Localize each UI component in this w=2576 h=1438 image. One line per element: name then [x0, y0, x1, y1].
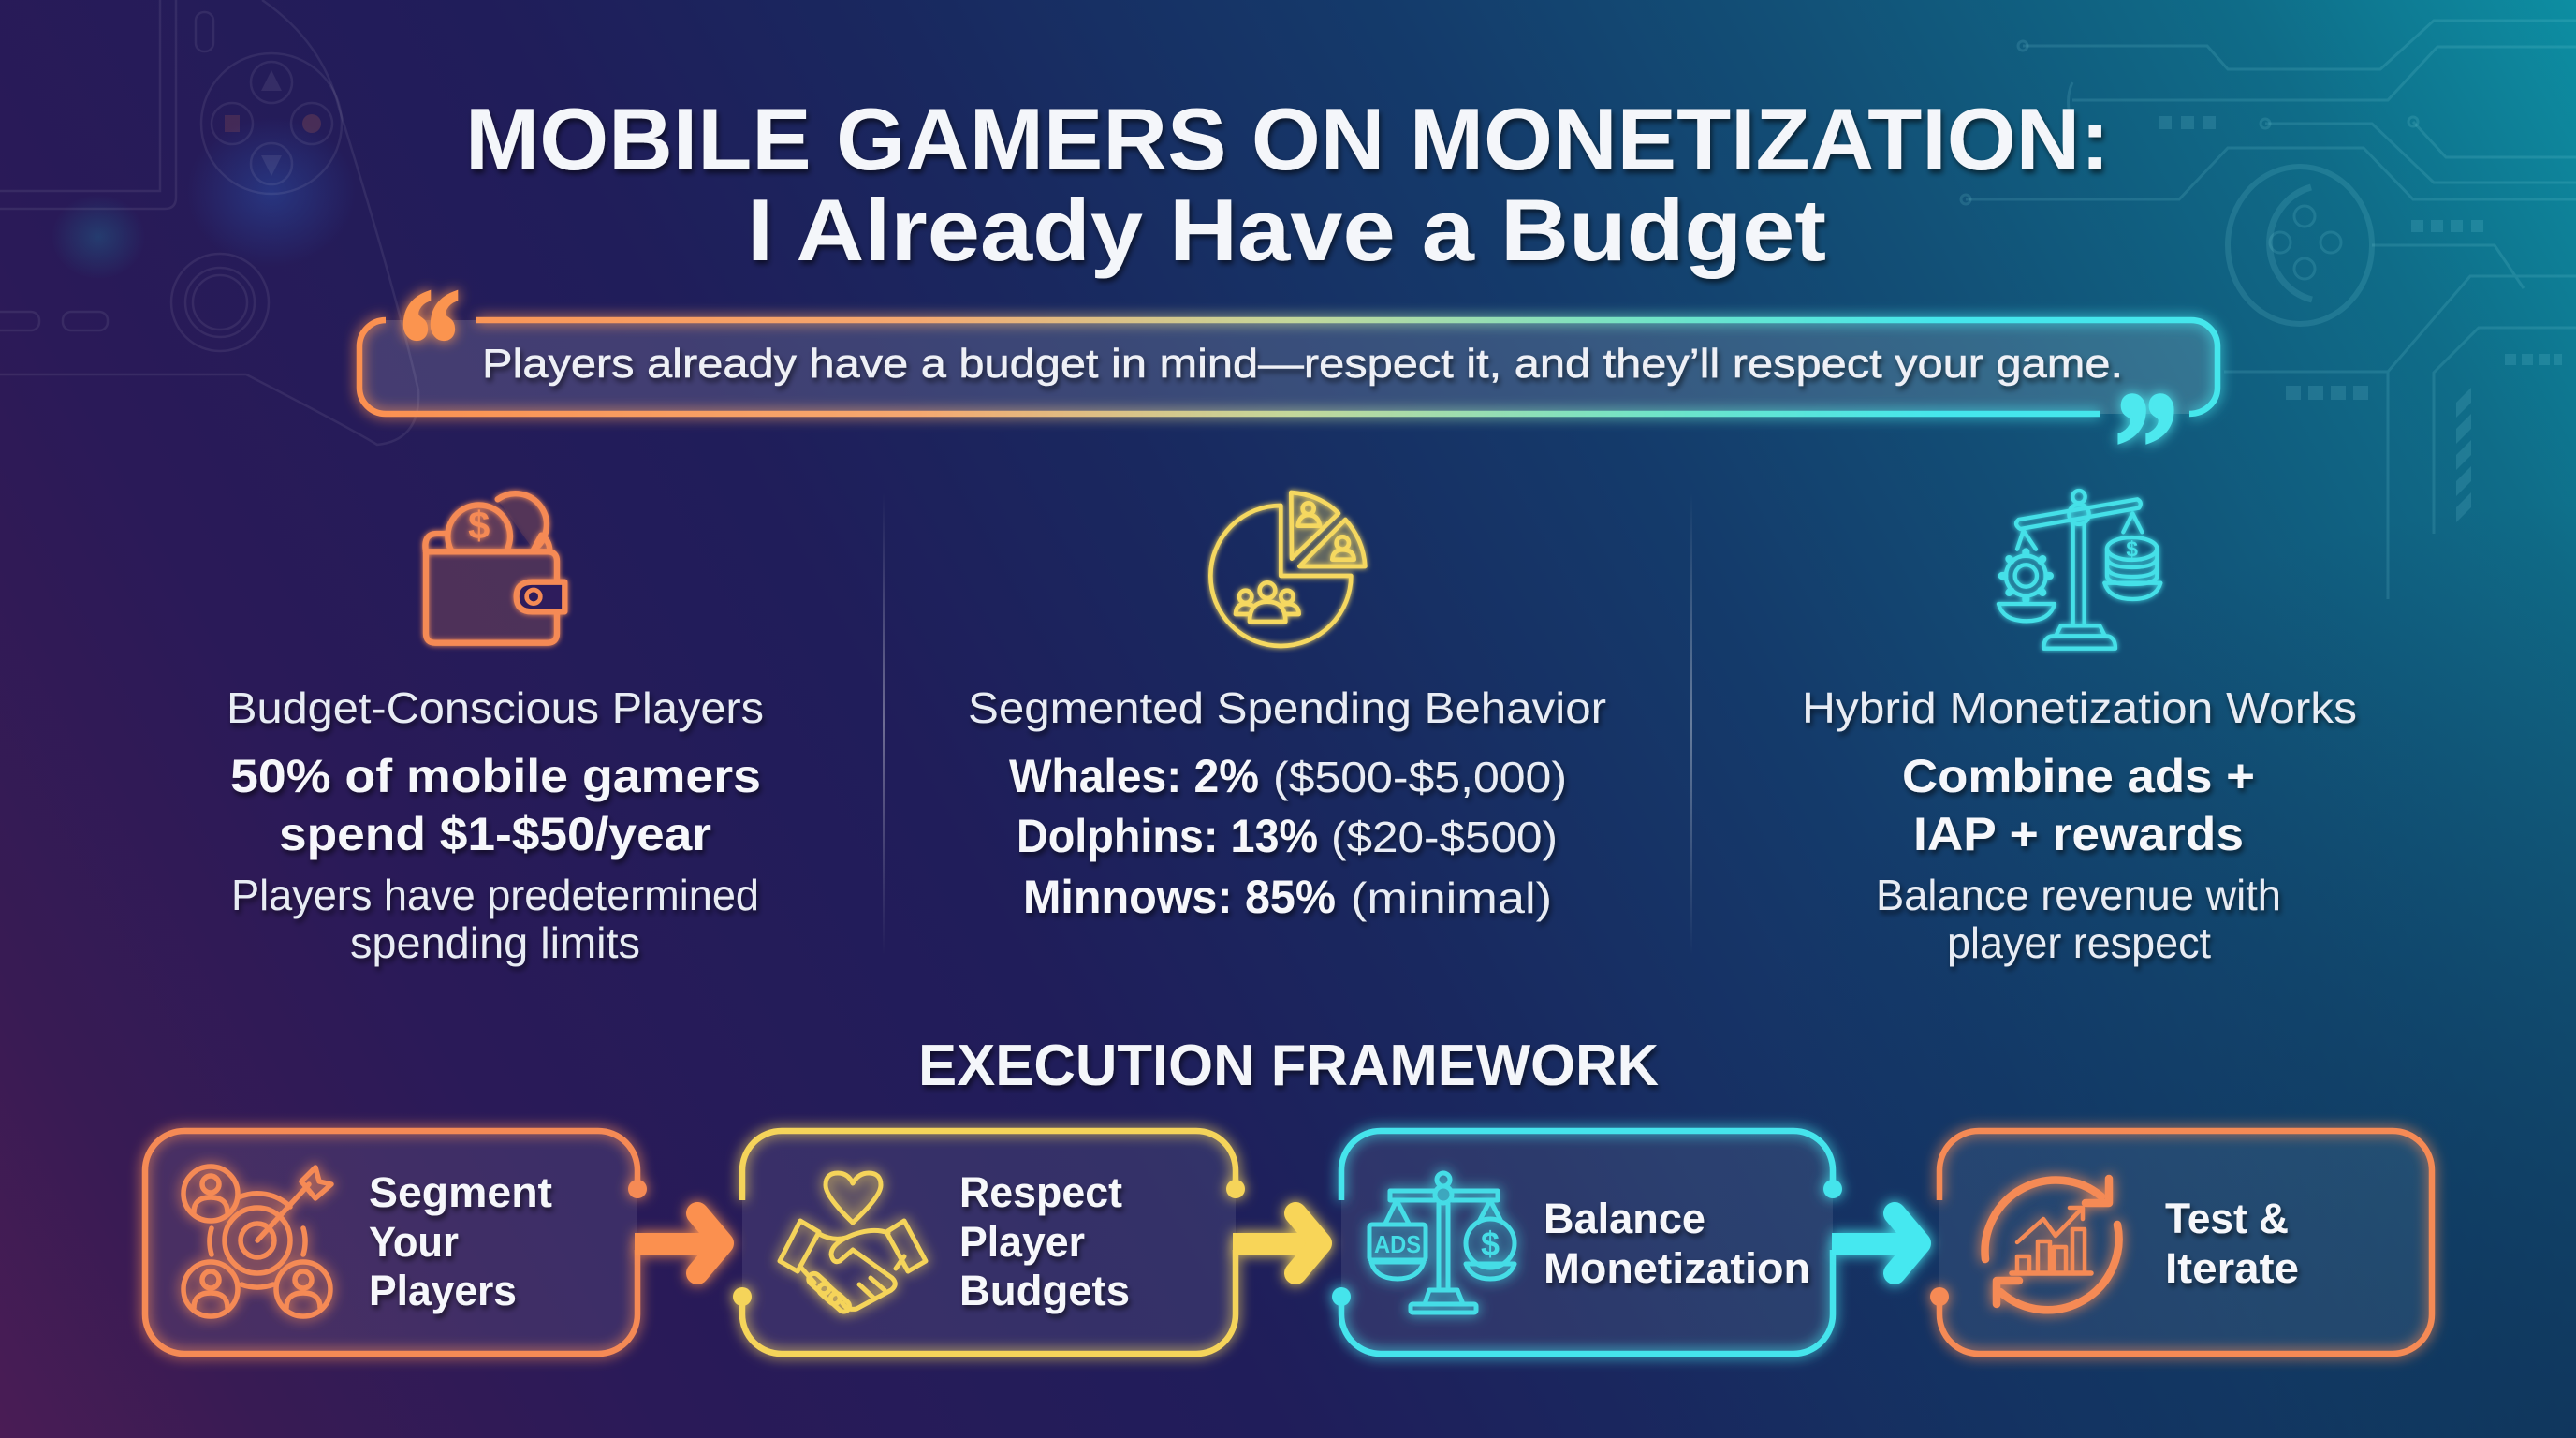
step label — [1544, 1195, 1810, 1292]
description: Players have predetermined — [231, 871, 759, 919]
icon: heart and handshake — [780, 1173, 926, 1313]
icon: ads versus dollar scale — [1369, 1173, 1515, 1313]
step label: Iterate — [2165, 1244, 2299, 1292]
step label: Monetization — [1544, 1244, 1810, 1292]
step label: Segment — [369, 1168, 552, 1216]
segment stats — [1009, 750, 1567, 923]
step label: Balance — [1544, 1195, 1705, 1242]
step label: Test & — [2165, 1195, 2289, 1242]
segment stats: Minnows: 85% — [1023, 871, 1336, 923]
icon: segmented pie chart — [1210, 492, 1365, 646]
heading: Segmented Spending Behavior — [968, 683, 1606, 732]
icon: balance scale — [1998, 491, 2160, 649]
step label: Players — [369, 1267, 517, 1314]
stat — [230, 750, 761, 860]
step label: Player — [959, 1218, 1085, 1266]
heading: Budget-Conscious Players — [227, 683, 764, 732]
step 3: balance monetization — [1332, 1131, 1842, 1354]
quote callout — [359, 257, 2217, 532]
title: I Already Have a Budget — [747, 181, 1826, 279]
step label — [2165, 1195, 2299, 1292]
title — [465, 90, 2110, 279]
stat: Combine ads + — [1902, 750, 2255, 802]
arrow 3 — [1832, 1213, 1920, 1273]
stat: spend $1-$50/year — [279, 808, 711, 860]
panel: budget-conscious players — [227, 493, 764, 967]
title: MOBILE GAMERS ON MONETIZATION: — [465, 90, 2110, 188]
stat — [1902, 750, 2255, 860]
section heading: execution framework: EXECUTION FRAMEWORK — [918, 1034, 1659, 1098]
panel: hybrid monetization works — [1802, 491, 2357, 967]
segment stats: (minimal) — [1351, 873, 1552, 922]
icon: ads versus dollar scale: ADS — [1374, 1230, 1421, 1258]
step label: Respect — [959, 1168, 1122, 1216]
description: spending limits — [350, 918, 640, 967]
icon: wallet with coins — [425, 493, 564, 643]
arrow 1 — [635, 1213, 723, 1273]
closing quote mark: ” — [2115, 360, 2178, 532]
opening quote mark: “ — [399, 257, 461, 429]
icon: ads versus dollar scale: $ — [1481, 1225, 1500, 1263]
description — [1876, 871, 2281, 967]
icon: target with players — [183, 1167, 331, 1316]
panel: segmented spending behavior — [968, 492, 1606, 923]
divider left — [883, 492, 886, 955]
divider right — [1690, 492, 1692, 955]
heading: Hybrid Monetization Works — [1802, 683, 2357, 732]
description — [231, 871, 759, 967]
segment stats: Dolphins: 13% — [1017, 810, 1318, 862]
description: Balance revenue with — [1876, 871, 2281, 919]
step label: Budgets — [959, 1267, 1130, 1314]
step 4: test and iterate — [1930, 1131, 2432, 1354]
icon: wallet with coins: $ — [468, 503, 490, 547]
icon: iterate cycle with chart — [1985, 1179, 2119, 1310]
stat: 50% of mobile gamers — [230, 750, 761, 802]
step 2: respect player budgets — [733, 1131, 1245, 1354]
icon: balance scale: $ — [2126, 536, 2138, 561]
step label — [369, 1168, 552, 1314]
step 1: segment your players — [145, 1131, 647, 1354]
quote text: Players already have a budget in mind—respect it, and they’ll respect your game. — [482, 341, 2123, 387]
stat: IAP + rewards — [1913, 808, 2244, 860]
segment stats: ($500-$5,000) — [1273, 753, 1567, 801]
decoration: game controller — [0, 0, 418, 445]
step label — [959, 1168, 1130, 1314]
description: player respect — [1947, 918, 2211, 967]
segment stats: Whales: 2% — [1009, 750, 1259, 802]
step label: Your — [369, 1218, 459, 1266]
decoration: circuit board — [1961, 21, 2576, 599]
segment stats: ($20-$500) — [1331, 813, 1558, 861]
arrow 2 — [1233, 1213, 1321, 1273]
